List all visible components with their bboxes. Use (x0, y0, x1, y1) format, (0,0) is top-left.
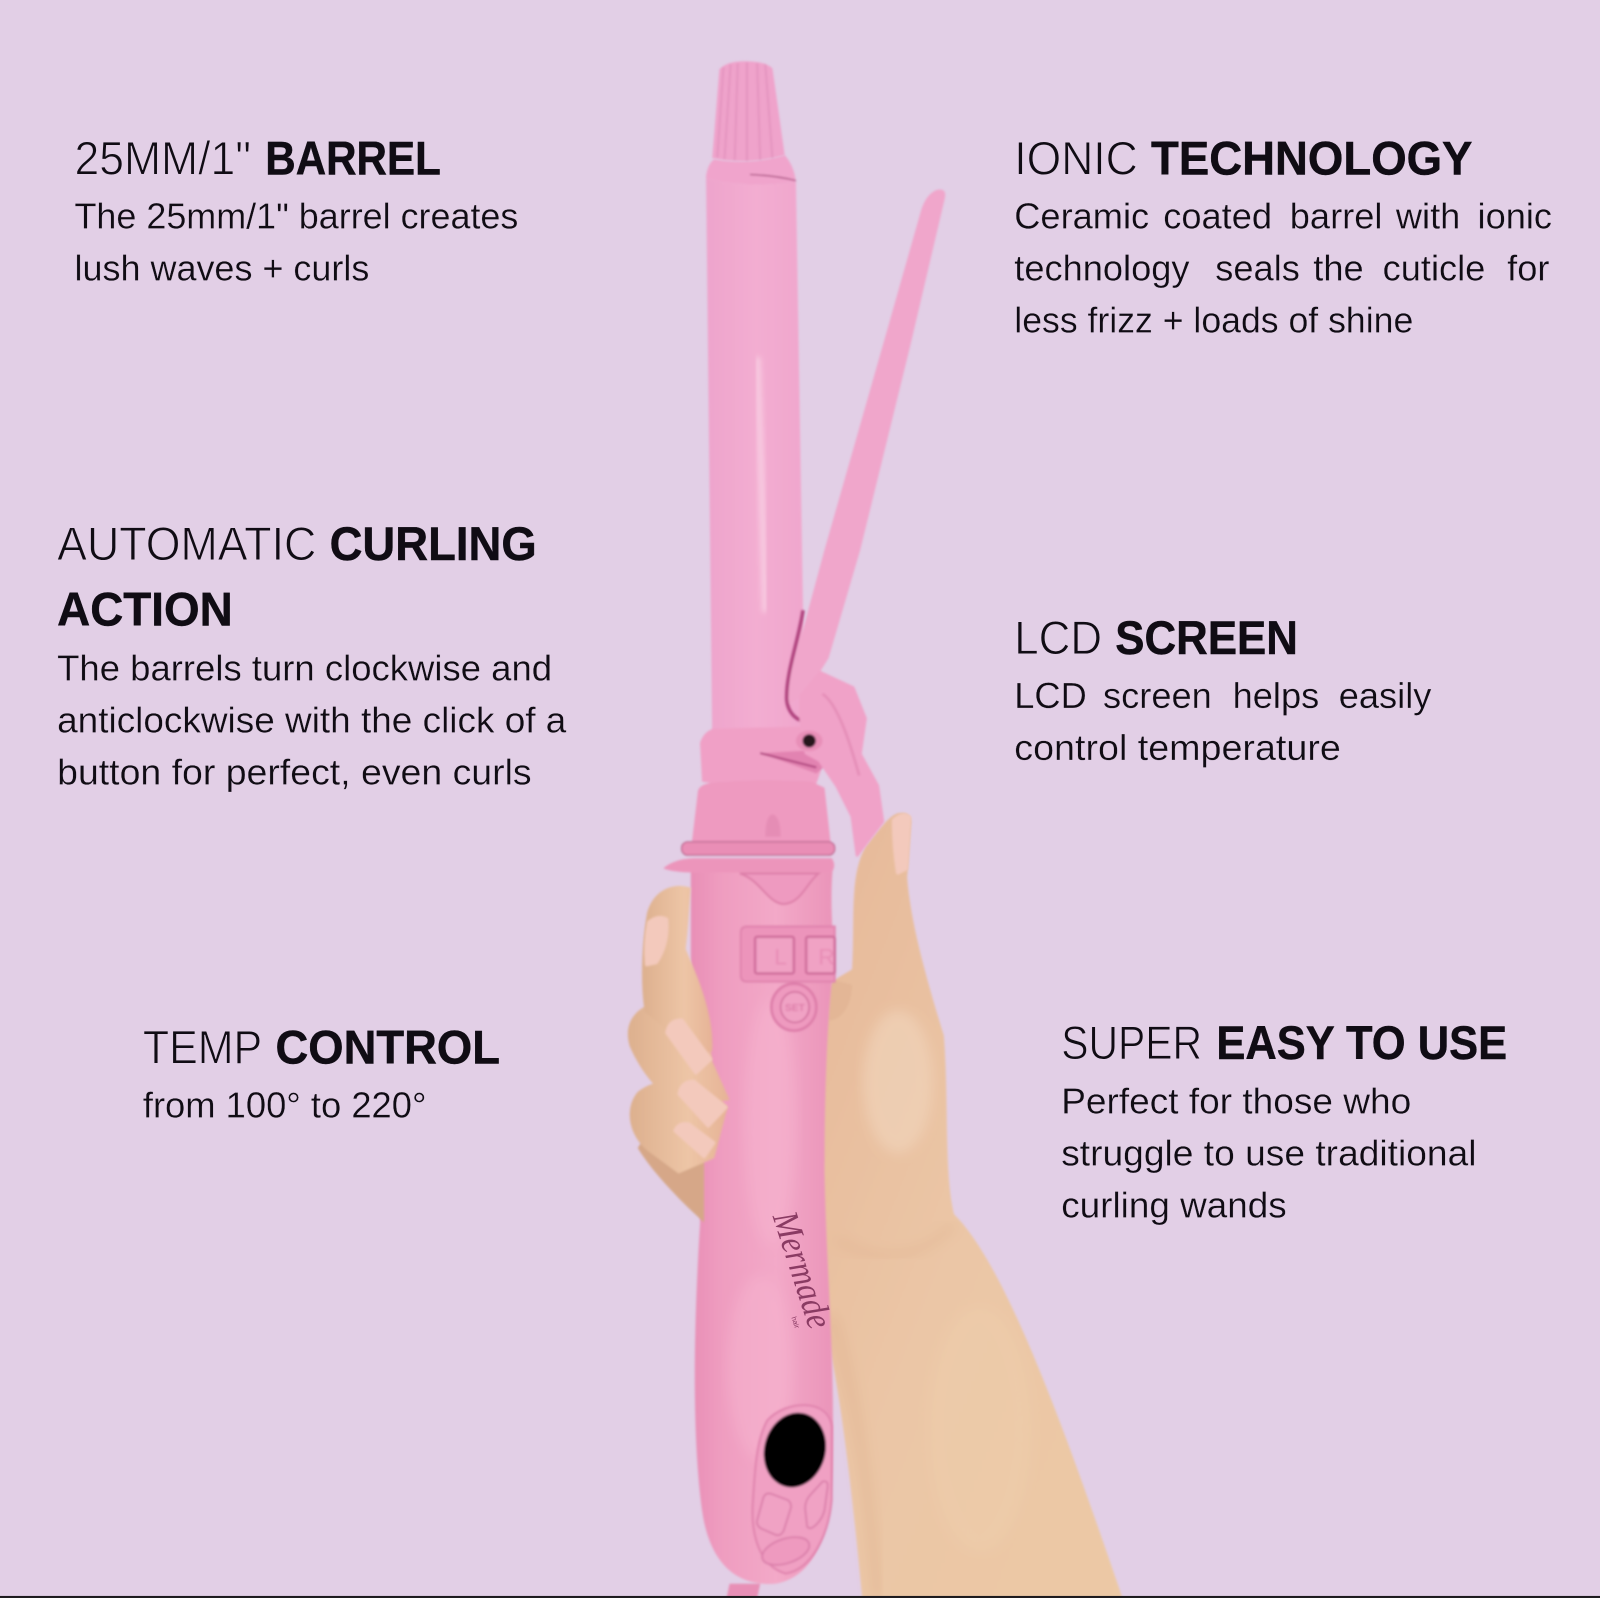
text: ionic description: technology (1014, 248, 1190, 289)
text: ionic description: coated (1163, 196, 1272, 237)
heading: ionic technology: TECHNOLOGY (1151, 133, 1472, 186)
feature: super easy to use (1061, 1017, 1507, 1225)
heading: super easy to use: EASY TO USE (1216, 1017, 1507, 1070)
text: temp range: from 100° to 220° (143, 1084, 427, 1125)
heading: automatic curling action (57, 518, 537, 637)
heading: temp control (143, 1021, 500, 1074)
text: ionic description: less frizz + loads of shine (1014, 300, 1413, 341)
heading: lcd screen (1014, 612, 1298, 665)
text: ionic description (1014, 196, 1552, 341)
text: lcd description: helps (1233, 675, 1319, 716)
feature: barrel (74, 133, 518, 289)
barrel ribbed tip (712, 61, 785, 161)
L and R buttons with SET dial: L (774, 944, 787, 969)
heading: automatic curling action: CURLING (330, 518, 537, 571)
feature: lcd screen (1014, 612, 1432, 768)
heading: automatic curling action: AUTOMATIC (57, 518, 316, 571)
text: ionic description: for (1507, 248, 1549, 289)
L and R buttons with SET dial: SET (785, 1003, 806, 1014)
heading: lcd screen: SCREEN (1115, 612, 1298, 665)
heading: barrel: 25MM/1" (74, 133, 251, 186)
text: barrel description: lush waves + curls (74, 248, 369, 289)
fingers (628, 886, 730, 1222)
LCD screen and control buttons (753, 1405, 834, 1573)
text: ionic description: barrel (1290, 196, 1382, 237)
heading: ionic technology (1014, 133, 1472, 186)
brand script logo: hair (789, 1316, 801, 1330)
text: curling action description (57, 648, 567, 793)
nails (646, 815, 909, 1156)
curling iron held in hand (628, 61, 1122, 1598)
L and R buttons with SET dial: R (818, 944, 835, 969)
heading: barrel (74, 133, 441, 186)
text: easy to use description: curling wands (1061, 1184, 1287, 1225)
text: curling action description: The barrels turn clockwise and (57, 648, 552, 689)
heading: automatic curling action: ACTION (57, 584, 233, 637)
clamp lever (787, 189, 945, 855)
heading: temp control: TEMP (143, 1021, 262, 1074)
text: lcd description: control temperature (1014, 727, 1341, 768)
barrel (706, 155, 806, 740)
feature: automatic curling action (57, 518, 567, 793)
text: easy to use description: struggle to use traditional (1061, 1132, 1477, 1173)
heading: super easy to use: SUPER (1061, 1017, 1202, 1070)
text: ionic description: seals (1215, 248, 1300, 289)
text: easy to use description (1061, 1080, 1477, 1225)
text: lcd description: easily (1339, 675, 1432, 716)
hand and arm (811, 813, 1122, 1598)
text: ionic description: the (1313, 248, 1364, 289)
text: ionic description: with (1395, 196, 1460, 237)
L and R buttons with SET dial (741, 927, 835, 1031)
heading: super easy to use (1061, 1017, 1507, 1070)
text: curling action description: anticlockwise with the click of a (57, 700, 567, 741)
text: ionic description: cuticle (1383, 248, 1485, 289)
collar and pivot screw (692, 727, 831, 843)
feature: ionic technology (1014, 133, 1552, 341)
heading: lcd screen: LCD (1014, 612, 1102, 665)
text: lcd description: screen (1103, 675, 1212, 716)
text: lcd description: LCD (1014, 675, 1087, 716)
text: easy to use description: Perfect for those who (1061, 1080, 1411, 1121)
text: barrel description (74, 196, 518, 289)
text: barrel description: The 25mm/1" barrel creates (74, 196, 518, 237)
heading: ionic technology: IONIC (1014, 133, 1138, 186)
brand script logo: Mermade (765, 1205, 841, 1333)
heading: barrel: BARREL (265, 133, 441, 186)
bottom edge line (0, 1596, 1600, 1598)
heading: temp control: CONTROL (276, 1021, 500, 1074)
text: curling action description: button for perfect, even curls (57, 752, 532, 793)
handle (663, 842, 835, 1598)
text: lcd description (1014, 675, 1432, 768)
feature: temp control (143, 1021, 500, 1125)
text: ionic description: Ceramic (1014, 196, 1149, 237)
text: ionic description: ionic (1478, 196, 1552, 237)
